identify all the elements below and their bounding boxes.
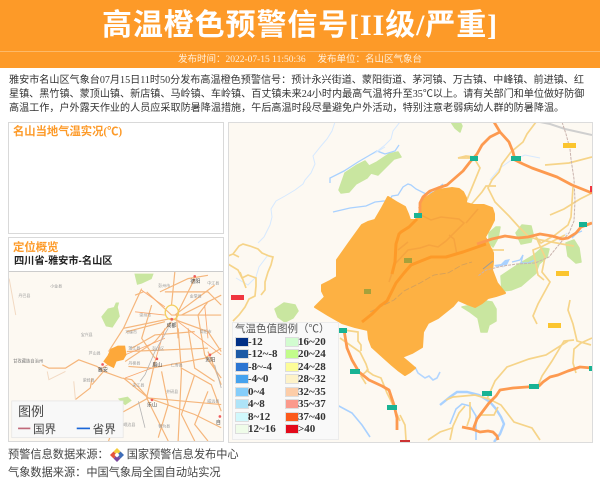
legend swatches left column: 8~12	[248, 411, 270, 423]
roads inside alert area	[389, 207, 478, 282]
header banner	[0, 0, 600, 68]
locator map: 甘孜藏族自治州	[13, 357, 43, 364]
locator map: 蒲江县	[128, 346, 140, 351]
source line: warning information: 预警信息数据来源： 国家预警信息发布中心	[8, 449, 239, 461]
minor roads	[228, 122, 592, 440]
locator map: 彭山区	[152, 346, 164, 351]
legend swatches left column: -12~-8	[248, 348, 278, 360]
locator map: 简阳市	[200, 329, 212, 334]
legend swatches left column: 0~4	[248, 386, 265, 398]
locator map: 德阳	[190, 278, 200, 285]
locator map: 丹棱县	[128, 360, 140, 365]
locator map: 资阳	[205, 356, 215, 363]
locator map: 夹江县	[132, 382, 144, 387]
warning text: 星镇、黑竹镇、蒙顶山镇、新店镇、马岭镇、车岭镇、百丈镇未来24小时内最高气温将升至35℃以上。请有关部门和单位做好防御	[9, 89, 584, 100]
road badges	[231, 143, 592, 442]
locator map: 仁寿县	[171, 362, 183, 367]
legend swatches left column: -12	[248, 336, 263, 348]
legend swatches left column: 12~16	[248, 423, 276, 435]
alert area	[315, 188, 505, 375]
legend swatches right column: 37~40	[298, 411, 326, 423]
locator map: 峨边县	[123, 422, 135, 427]
locator map: 宝兴县	[81, 332, 93, 337]
panel heading: 定位概览	[13, 242, 59, 254]
locator map: 犍为县	[158, 424, 170, 429]
highways	[344, 122, 592, 440]
locator map: 金堂县	[190, 294, 202, 299]
legend swatches left column: -4~0	[248, 373, 268, 385]
panel: local temperature	[8, 122, 224, 234]
locator map: 小金县	[50, 284, 62, 289]
locator map: 威远县	[207, 399, 219, 404]
locator map: 雅安	[98, 366, 108, 373]
locator map: 自	[216, 419, 221, 426]
legend swatches right column: 20~24	[298, 348, 326, 360]
legend swatches right column: 35~37	[298, 398, 326, 410]
panel: location overview	[8, 237, 224, 442]
warning text	[9, 74, 584, 114]
rivers	[330, 145, 582, 442]
map legend: 国界	[33, 421, 57, 437]
legend swatches right column: 32~35	[298, 386, 326, 398]
locator map: 荥经县	[83, 378, 95, 383]
legend swatches right column: >40	[298, 423, 315, 435]
legend swatches left column: 4~8	[248, 398, 265, 410]
warning text: 高温工作，户外露天作业的人员应采取防暑降温措施，午后高温时段尽量避免户外活动，特别注意老弱病幼人群的防暑降温。	[9, 103, 564, 114]
locator map	[9, 271, 223, 441]
region name: 四川省-雅安市-名山区	[14, 256, 112, 267]
map legend: 图例	[18, 401, 44, 420]
locator map: 成都	[167, 322, 177, 329]
legend swatches right column	[285, 336, 326, 435]
warning text: 雅安市名山区气象台07月15日11时50分发布高温橙色预警信号：预计永兴街道、蒙阳街道、茅河镇、万古镇、中峰镇、前进镇、红	[9, 75, 584, 86]
map legend	[12, 401, 123, 438]
icon: warning centre logo	[110, 448, 124, 462]
locator map: 眉山	[152, 361, 162, 368]
legend swatches left column: -8~-4	[248, 361, 272, 373]
locator map: 崇州市	[139, 313, 151, 318]
legend swatches left column	[235, 336, 278, 435]
locator map: 井研县	[166, 389, 178, 394]
panel heading: 名山当地气温实况(℃)	[13, 126, 122, 138]
main map panel	[229, 123, 592, 442]
map legend: 省界	[93, 421, 116, 437]
legend swatches right column: 24~28	[298, 361, 326, 373]
legend swatches right column: 16~20	[298, 336, 326, 348]
legend title: 气温色值图例（℃）	[235, 323, 330, 335]
header divider	[0, 51, 600, 52]
green areas	[275, 122, 581, 332]
locator map: 中江县	[207, 280, 219, 285]
temperature legend	[232, 322, 339, 440]
locator map: 丹巴县	[18, 293, 30, 298]
locator map: 彭州市	[158, 283, 170, 288]
map frame	[228, 122, 593, 443]
locator map: 邛崃市	[125, 330, 137, 335]
locator map: 乐山	[147, 402, 157, 409]
publication info: 发布时间：2022-07-15 11:50:36 发布单位：名山区气象台	[178, 55, 422, 65]
title: 高温橙色预警信号[II级/严重]	[102, 9, 498, 42]
locator map: 芦山县	[89, 351, 101, 356]
legend swatches right column: 28~32	[298, 373, 326, 385]
source line: weather data: 气象数据来源：中国气象局全国自动站实况	[8, 467, 221, 479]
